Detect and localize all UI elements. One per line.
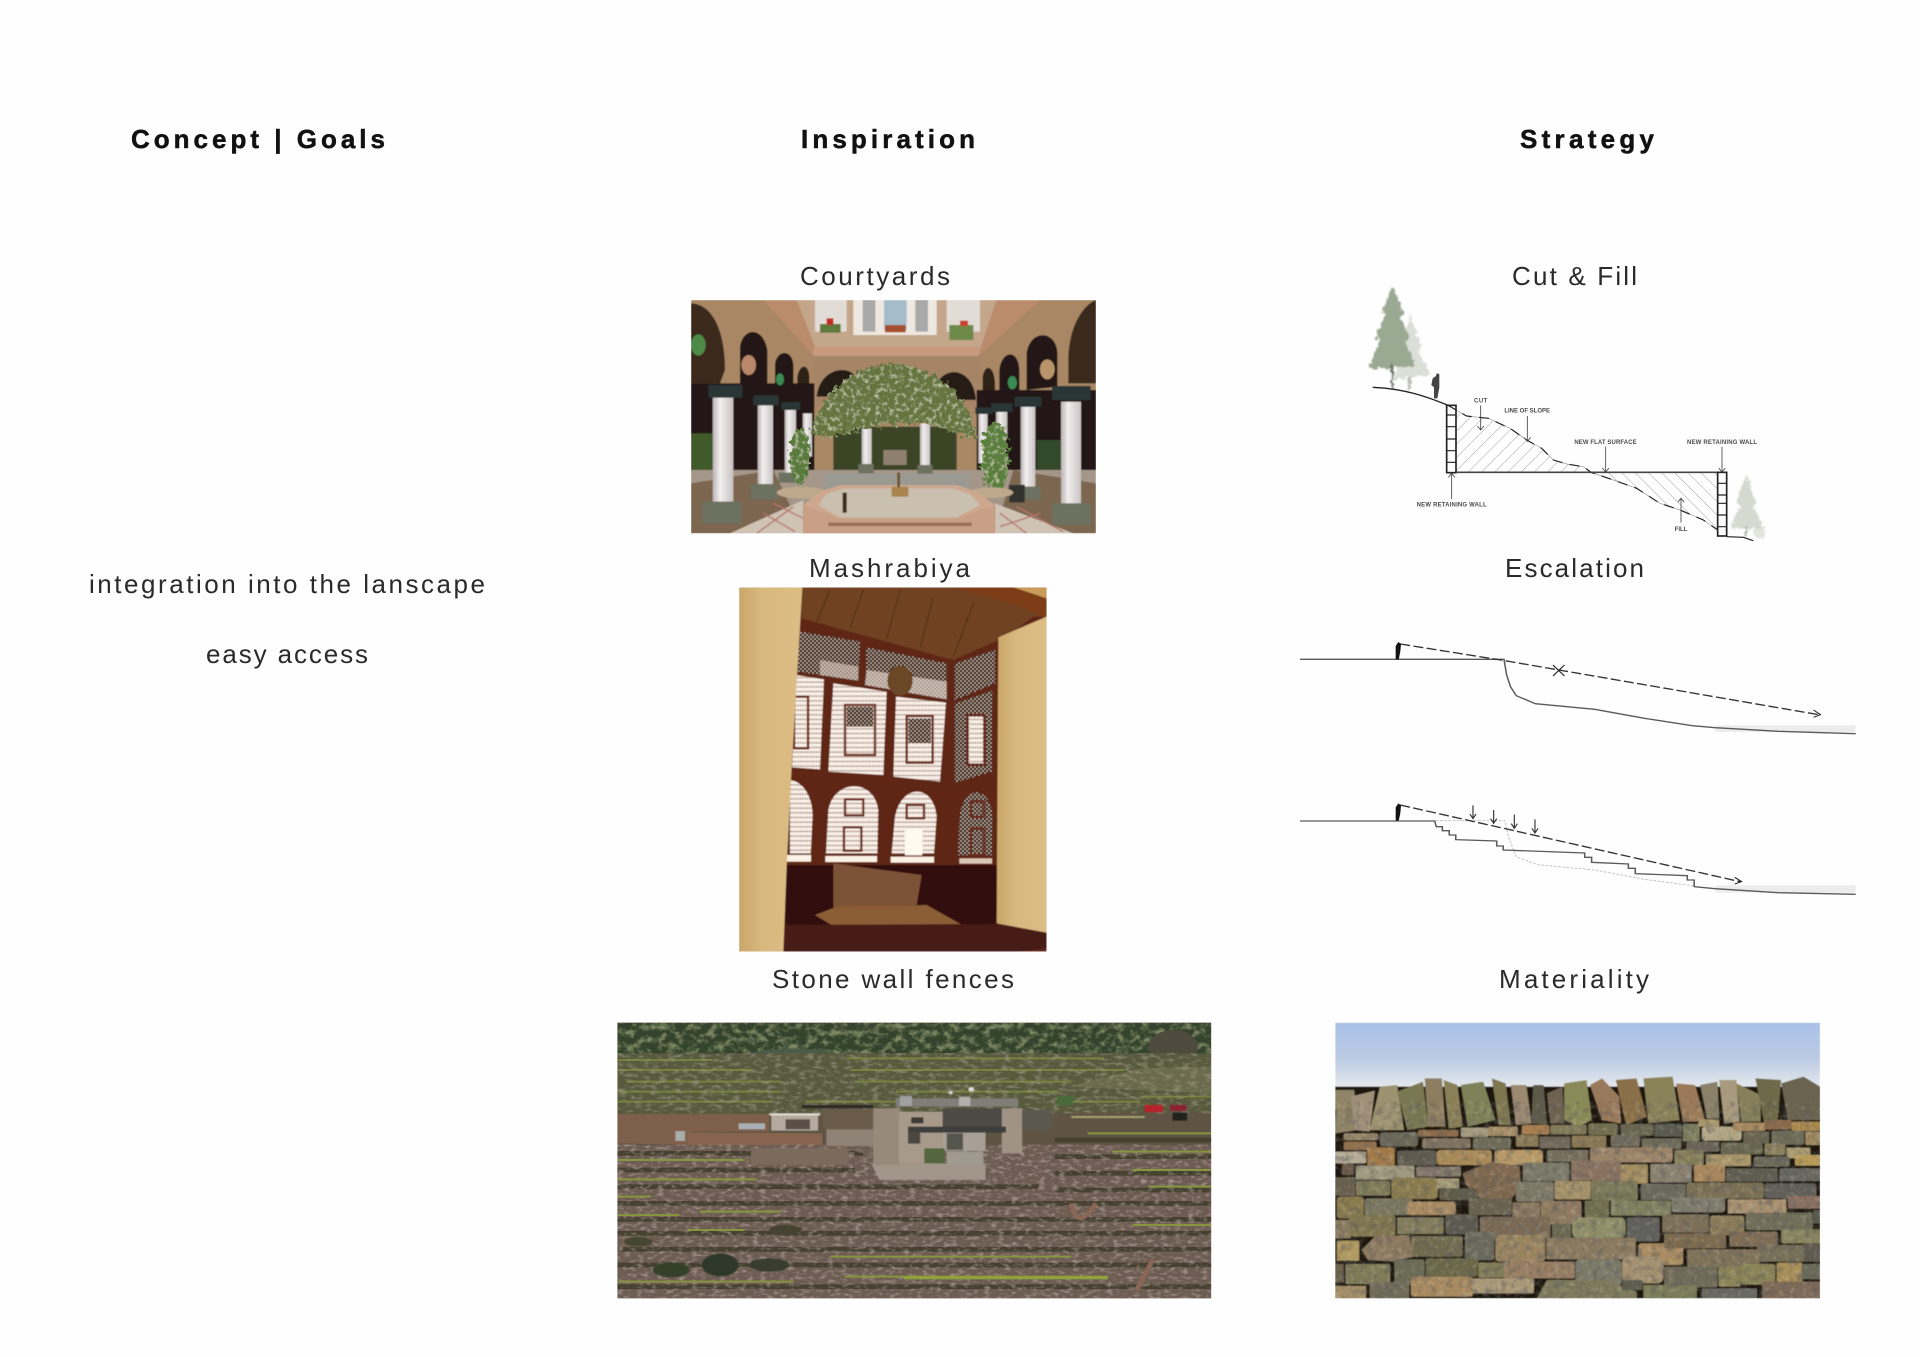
coping stones [1335, 1077, 1820, 1133]
icon: person [1431, 373, 1439, 398]
upper terraces [617, 1053, 1211, 1113]
label: Cut & Fill: Cut & Fill [1512, 261, 1637, 291]
section: escalated terraces [1300, 803, 1856, 894]
arrows [1448, 405, 1725, 523]
dark arcades [691, 303, 725, 383]
upper lattice [797, 632, 860, 681]
arched lattice [790, 780, 813, 853]
label: Stone wall fences: Stone wall fences [772, 964, 1014, 994]
dark bushes [624, 1225, 802, 1277]
ground line [1373, 387, 1753, 541]
lower terraces [617, 1145, 1211, 1298]
lower bright green strip [904, 1276, 1108, 1279]
hatch: fill region [1592, 472, 1718, 530]
callout: new retaining wall right: NEW RETAINING WALL [1687, 440, 1757, 446]
columns [713, 397, 1081, 505]
red stone wall [617, 1114, 769, 1145]
icon: right tree [1731, 474, 1767, 539]
callout: cut: CUT [1474, 398, 1488, 404]
hatch: cut region [1456, 412, 1592, 472]
tree [790, 363, 1009, 492]
ceiling [802, 587, 1047, 662]
forest [617, 1023, 1211, 1053]
house [675, 1087, 1187, 1180]
label: Escalation: Escalation [1505, 553, 1644, 583]
photo: terraced hillside with stone walls [617, 1023, 1211, 1298]
lamps [741, 355, 756, 375]
callout: line of slope: LINE OF SLOPE [1504, 409, 1550, 415]
photo: courtyard [691, 300, 1096, 533]
callout: fill: FILL [1675, 527, 1688, 533]
window frame [802, 618, 998, 662]
diagram: escalation sections [1300, 642, 1856, 894]
section: existing slope [1300, 642, 1856, 734]
bench [785, 865, 998, 925]
callouts [1417, 398, 1757, 533]
diagram: cut and fill section [1369, 286, 1767, 541]
heading: Concept | Goals: Concept | Goals [131, 124, 385, 154]
fountain [804, 484, 994, 519]
callout: new retaining wall left: NEW RETAINING WALL [1417, 502, 1487, 508]
side walls [762, 300, 812, 354]
lantern [887, 666, 913, 696]
retaining walls and flat surface [1447, 405, 1727, 536]
label: Materiality: Materiality [1499, 964, 1649, 994]
goal: easy access: easy access [206, 639, 368, 669]
back wall upper windows [790, 300, 997, 350]
piers [739, 587, 802, 952]
photo: dry stone wall [1335, 1023, 1820, 1298]
arrows: view steps [1470, 805, 1538, 833]
label: Mashrabiya: Mashrabiya [809, 553, 971, 583]
photo: mashrabiya window [739, 587, 1047, 952]
heading: Strategy: Strategy [1520, 124, 1655, 154]
wall courses [1335, 1119, 1820, 1298]
heading: Inspiration: Inspiration [801, 124, 975, 154]
floor [691, 469, 1096, 506]
icon: left trees [1369, 286, 1430, 391]
text block: goals [89, 569, 485, 669]
goal: integration into the landscape: integration into the lanscape [89, 569, 485, 599]
label: Courtyards: Courtyards [800, 261, 950, 291]
inner court behind tree [833, 427, 957, 470]
callout: new flat surface: NEW FLAT SURFACE [1574, 440, 1637, 446]
middle lattice [792, 675, 824, 769]
